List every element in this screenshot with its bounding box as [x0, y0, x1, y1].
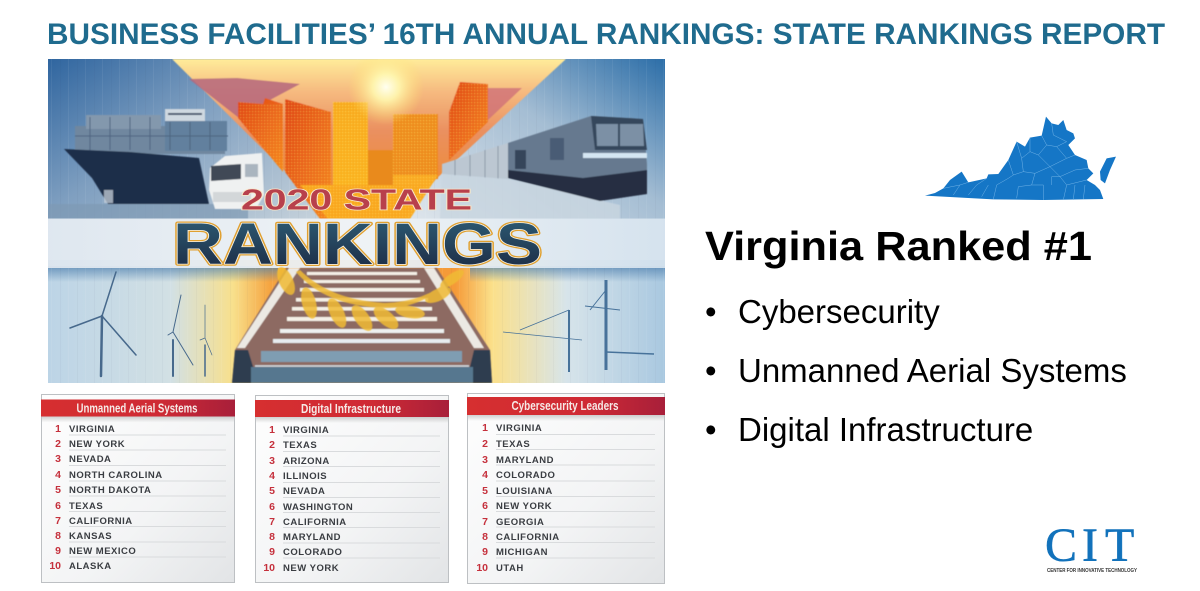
title: BUSINESS FACILITIES’ 16TH ANNUAL RANKINGS: STATE RANKINGS REPORT [47, 18, 1165, 51]
panel header [467, 397, 665, 415]
bullet list [705, 293, 1127, 448]
ranked list: 7 [269, 516, 275, 528]
staircase [232, 268, 492, 383]
ranked list: MARYLAND [283, 532, 341, 543]
2020 STATE lettering: 2020 STATE [241, 184, 472, 216]
RANKINGS lettering [175, 221, 542, 266]
ranked list: 4 [482, 469, 488, 481]
RANKINGS lettering: RANKINGS [173, 212, 542, 277]
ranked list: NEW YORK [496, 501, 552, 512]
ranked list: WASHINGTON [283, 502, 353, 513]
ranked list: TEXAS [283, 440, 317, 451]
ranked list: TEXAS [69, 501, 103, 512]
city skyline at sunset [172, 59, 566, 219]
ranked list: 6 [269, 501, 275, 513]
ranked list: NEW MEXICO [69, 546, 136, 557]
bullet list: • [705, 411, 717, 448]
ranked list: NEVADA [283, 486, 325, 497]
ranked list: CALIFORNIA [496, 532, 560, 543]
ranked list: 8 [55, 530, 61, 542]
panel header [255, 400, 449, 417]
backdrop texture [51, 59, 664, 178]
ranked list: NORTH DAKOTA [69, 485, 151, 496]
ranked list: 1 [482, 422, 488, 434]
ranked list: 2 [269, 439, 275, 451]
ranked list: 3 [482, 454, 488, 466]
ranked list: 8 [269, 531, 275, 543]
ranked list: 5 [482, 485, 488, 497]
ranked list: COLORADO [283, 547, 342, 558]
ranked list: CALIFORNIA [283, 517, 347, 528]
laurel branch [273, 264, 466, 334]
ranked list: NEW YORK [69, 439, 125, 450]
ranked list: ARIZONA [283, 456, 330, 467]
heading: Virginia Ranked #1: Virginia Ranked #1 [705, 223, 1092, 269]
freight train [440, 116, 647, 219]
ranked list: TEXAS [496, 439, 530, 450]
RANKINGS lettering: RANKINGS [173, 212, 542, 277]
ranked list [263, 424, 440, 574]
ranked list: MARYLAND [496, 455, 554, 466]
panel header: Cybersecurity Leaders [512, 398, 618, 413]
ranked list: CALIFORNIA [69, 516, 133, 527]
panel: Digital Infrastructure [255, 396, 449, 582]
ranked list: UTAH [496, 563, 524, 574]
white banner band [48, 218, 665, 268]
ranked list: 10 [263, 562, 275, 574]
ranked list: VIRGINIA [283, 425, 329, 436]
ranked list: LOUISIANA [496, 486, 553, 497]
icon: Virginia county map [925, 117, 1116, 200]
ranked list: 7 [482, 516, 488, 528]
bullet list: Cybersecurity [738, 293, 940, 330]
ranked list [476, 422, 655, 574]
upper right panel backdrop [378, 59, 665, 219]
ranked list: 9 [269, 546, 275, 558]
bullet list: Unmanned Aerial Systems [738, 352, 1127, 389]
ranked list: COLORADO [496, 470, 555, 481]
ranked list: 3 [55, 453, 61, 465]
bullet list: Digital Infrastructure [738, 411, 1033, 448]
ranked list: 3 [269, 455, 275, 467]
white truck [209, 153, 264, 209]
panel: Cybersecurity Leaders [467, 394, 665, 584]
wind turbines [70, 272, 212, 376]
panel header: Unmanned Aerial Systems [76, 400, 198, 416]
ranked list: MICHIGAN [496, 547, 548, 558]
ranked list: VIRGINIA [496, 423, 542, 434]
ranked list: 4 [55, 469, 61, 481]
panel header: Digital Infrastructure [301, 401, 401, 416]
ranked list: 10 [49, 560, 61, 572]
ranked list: 9 [55, 545, 61, 557]
upper left panel backdrop [48, 59, 378, 219]
ranked list: NORTH CAROLINA [69, 470, 163, 481]
ranked list: GEORGIA [496, 517, 544, 528]
panel: Unmanned Aerial Systems [41, 394, 235, 582]
construction cranes [503, 280, 654, 372]
ranked list: 2 [55, 438, 61, 450]
ranked list: ILLINOIS [283, 471, 327, 482]
ranked list: 8 [482, 531, 488, 543]
ranked list: 6 [55, 500, 61, 512]
cargo ship [48, 109, 248, 219]
hero image: 2020 State Rankings [48, 49, 665, 383]
logo: CIT: CENTER FOR INNOVATIVE TECHNOLOGY [1047, 568, 1137, 574]
ranked list: 1 [269, 424, 275, 436]
ranked list: 5 [269, 485, 275, 497]
ranked list: NEW YORK [283, 563, 339, 574]
ranked list: KANSAS [69, 531, 112, 542]
ranked list: NEVADA [69, 454, 111, 465]
ranked list: 5 [55, 484, 61, 496]
ranked list: 6 [482, 500, 488, 512]
bullet list: • [705, 293, 717, 330]
sun glow [354, 59, 418, 122]
ranked list: 4 [269, 470, 275, 482]
bullet list: • [705, 352, 717, 389]
ranked list: VIRGINIA [69, 424, 115, 435]
ranked list: 1 [55, 423, 61, 435]
ranked list: ALASKA [69, 561, 112, 572]
ranked list [49, 423, 226, 572]
ranked list: 10 [476, 562, 488, 574]
logo: CIT: CIT [1045, 519, 1134, 572]
ranked list: 2 [482, 438, 488, 450]
ranked list: 7 [55, 515, 61, 527]
ranked list: 9 [482, 546, 488, 558]
bottom backdrop [48, 260, 665, 383]
